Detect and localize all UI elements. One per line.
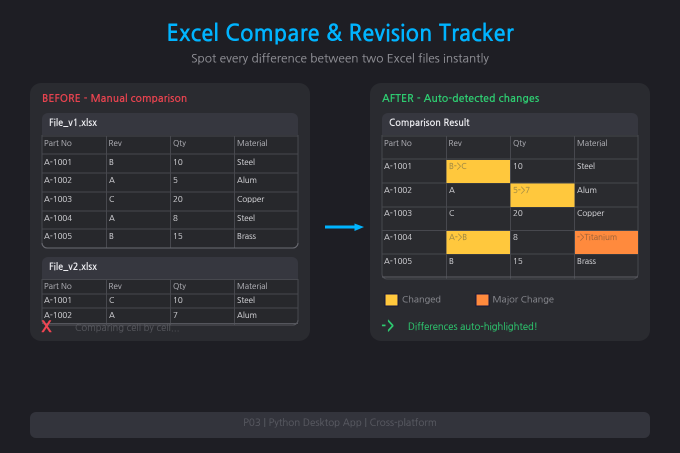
comparing note: Comparing cell by cell... xyxy=(75,324,180,333)
table: File_v2: 7 xyxy=(173,311,178,320)
legend: major change xyxy=(476,294,554,306)
table: comparison result xyxy=(382,113,638,279)
table: comparison result: C xyxy=(449,209,454,218)
panel: before xyxy=(30,83,310,341)
after heading: AFTER - Auto-detected changes xyxy=(382,93,540,104)
table: File_v1: 8 xyxy=(173,214,178,223)
auto-highlight note: Differences auto-highlighted! xyxy=(408,323,538,332)
table: File_v2: Rev xyxy=(108,282,122,291)
table: File_v1: 10 xyxy=(173,158,183,167)
table: File_v1: A-1001 xyxy=(44,158,72,167)
table: File_v2 xyxy=(42,257,298,325)
legend: major change: Major Change xyxy=(492,296,554,304)
table: comparison result: A-1001 xyxy=(384,162,412,171)
table: File_v1: Qty xyxy=(173,139,186,148)
table: comparison result: 15 xyxy=(513,257,523,266)
table: comparison result: 5->7 xyxy=(513,185,530,195)
table: comparison result: Comparison Result xyxy=(389,119,470,128)
table: comparison result: A-1003 xyxy=(384,209,412,218)
table: File_v2: A-1001 xyxy=(44,296,72,305)
table: File_v1: B xyxy=(109,158,114,167)
footer bar: P03 | Python Desktop App | Cross-platform xyxy=(243,417,437,428)
table: File_v2: Qty xyxy=(173,282,186,291)
footer bar xyxy=(30,412,650,438)
table: File_v2: Alum xyxy=(237,311,257,320)
panel: after xyxy=(370,83,650,341)
arrow: before to after xyxy=(325,224,364,231)
table: File_v1: Alum xyxy=(237,176,257,185)
table: comparison result: Steel xyxy=(577,162,595,171)
table: File_v1 xyxy=(42,113,298,248)
red X mark: X xyxy=(42,320,52,335)
table: File_v1: File_v1.xlsx xyxy=(49,119,97,128)
table: comparison result: A-1005 xyxy=(384,257,412,266)
before heading: BEFORE - Manual comparison xyxy=(42,93,187,104)
table: comparison result: A xyxy=(449,186,455,195)
table: File_v1: 15 xyxy=(173,232,183,241)
table: File_v1: 5 xyxy=(173,176,178,185)
table: comparison result: A->B xyxy=(449,232,467,242)
table: File_v1: A-1004 xyxy=(44,214,72,223)
title: Excel Compare & Revision Tracker xyxy=(166,23,515,45)
table: File_v2: A-1002 xyxy=(44,311,72,320)
table: comparison result: Brass xyxy=(577,257,597,266)
table: comparison result: ->Titanium xyxy=(577,232,617,242)
table: File_v2: Part No xyxy=(44,282,72,291)
table: comparison result: Alum xyxy=(577,186,597,195)
green arrow glyph: -> xyxy=(382,319,394,332)
table: File_v1: A-1002 xyxy=(44,176,72,185)
table: comparison result: A-1004 xyxy=(384,233,412,242)
table: File_v2: 10 xyxy=(173,296,183,305)
table: File_v2: A xyxy=(109,311,115,320)
table: File_v1: B xyxy=(109,232,114,241)
table: File_v2: C xyxy=(109,296,114,305)
table: comparison result: Rev xyxy=(448,139,462,148)
table: comparison result: Copper xyxy=(577,209,604,218)
table: comparison result: 20 xyxy=(513,209,523,218)
legend: changed: Changed xyxy=(402,296,441,304)
table: File_v1: Steel xyxy=(237,214,255,223)
legend: changed xyxy=(385,294,441,306)
table: File_v2: Steel xyxy=(237,296,255,305)
table: comparison result: Material xyxy=(577,139,608,148)
table: comparison result: 10 xyxy=(513,162,523,171)
table: comparison result: 8 xyxy=(513,233,518,242)
table: comparison result: B xyxy=(449,257,454,266)
table: comparison result: A-1002 xyxy=(384,186,412,195)
table: File_v1: Copper xyxy=(237,195,264,204)
table: comparison result: Qty xyxy=(513,139,526,148)
table: File_v1: C xyxy=(109,195,114,204)
table: File_v2: File_v2.xlsx xyxy=(49,263,97,272)
highlighted cells xyxy=(446,160,638,254)
table: comparison result: Part No xyxy=(384,139,412,148)
table: File_v1: Material xyxy=(237,139,268,148)
table: File_v1: 20 xyxy=(173,195,183,204)
table: comparison result: B->C xyxy=(449,161,467,171)
table: File_v1: Part No xyxy=(44,139,72,148)
table: File_v1: Steel xyxy=(237,158,255,167)
table: File_v1: Rev xyxy=(108,139,122,148)
table: File_v1: Brass xyxy=(237,232,257,241)
table: File_v1: A xyxy=(109,214,115,223)
subtitle: Spot every difference between two Excel files instantly xyxy=(191,52,489,64)
table: File_v1: A xyxy=(109,176,115,185)
table: File_v1: A-1005 xyxy=(44,232,72,241)
table: File_v2: Material xyxy=(237,282,268,291)
table: File_v1: A-1003 xyxy=(44,195,72,204)
